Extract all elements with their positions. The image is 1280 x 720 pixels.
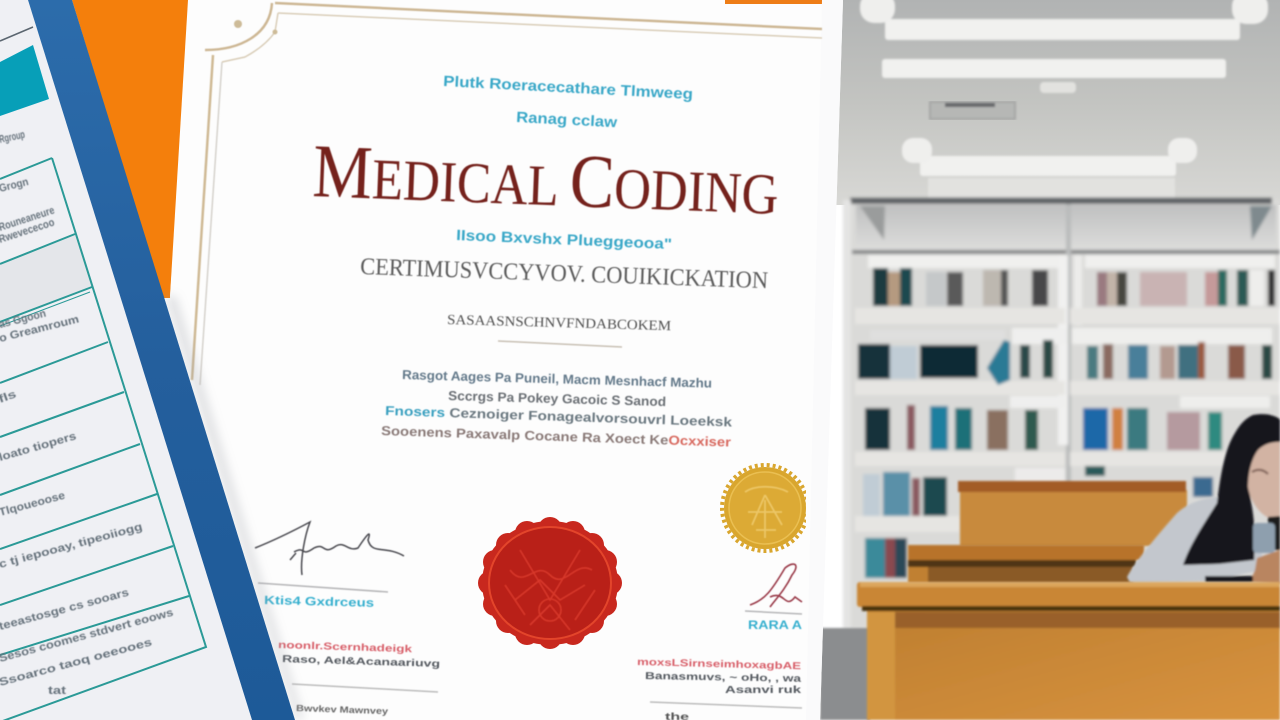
- table row labels: [0, 129, 175, 697]
- right signature block: Asanvi ruk: [725, 685, 802, 696]
- left signature block: Ktis4 Gxdrceus: [264, 593, 375, 610]
- books row 4: [863, 466, 1213, 516]
- table row labels: o Greamroum: [0, 313, 81, 345]
- ceiling lights: [860, 0, 1268, 200]
- top teal line: Plutk Roeracecathare Tlmweeg: [443, 73, 693, 103]
- teal header band: [0, 45, 49, 116]
- back desk: [958, 481, 1187, 546]
- checklist table: [0, 158, 206, 720]
- middle desk: [908, 545, 1144, 583]
- table row labels: Sesos coomes stdvert eoows: [0, 607, 175, 665]
- title: MEDICAL CODING: [311, 129, 780, 231]
- certification line: CERTIMUSVCCYVOV. COUIKICKATION: [360, 254, 768, 294]
- books row 1: [873, 268, 1275, 306]
- hands: [1250, 550, 1280, 584]
- right signature block: moxsLSirnseimhoxagbAE: [637, 657, 802, 672]
- heading text block: [311, 73, 780, 450]
- certificate: [170, 0, 843, 720]
- small caps line: SASAASNSCHNVFNDABCOKEM: [447, 313, 672, 334]
- body text line 3: Fnosers Ceznoiger Fonagealvorsouvrl Loeeksk: [385, 403, 733, 430]
- left signature block: [258, 583, 440, 716]
- top orange edge: [725, 0, 823, 4]
- woman studying: [1127, 414, 1280, 584]
- shirt: [1253, 523, 1275, 553]
- signature right: [750, 564, 802, 607]
- right signature block: Banasmuvs, ~ oHo, , wa: [645, 671, 802, 685]
- paper sheet: [0, 0, 260, 720]
- certificate sheet: [170, 0, 843, 720]
- phone: [1205, 576, 1253, 582]
- table row labels: teeastosge cs sooars: [0, 587, 130, 633]
- checklist paper: [0, 0, 260, 720]
- signature left: [255, 522, 404, 575]
- ceiling vent: [930, 102, 1015, 119]
- body text line 1: Rasgot Aages Pa Puneil, Macm Mesnhacf Mazhu: [402, 367, 712, 391]
- body text line 2: Sccrgs Pa Pokey Gacoic S Sanod: [448, 388, 666, 409]
- books row 5: [865, 538, 907, 578]
- bookshelves: [843, 198, 1280, 630]
- books row 2: [858, 340, 1272, 385]
- left signature block: noonlr.Scernhadeigk: [278, 640, 413, 655]
- sheet right edge shadow: [806, 0, 843, 720]
- floor: [820, 628, 870, 720]
- ornamental border: [192, 3, 822, 385]
- front desk: [857, 582, 1280, 720]
- table row labels: c tj iepooay, tipeoiiogg: [0, 521, 144, 571]
- ceiling: [820, 0, 1280, 205]
- arm over hair: [1175, 560, 1262, 582]
- divider: [498, 341, 622, 347]
- orange folder: [72, 0, 190, 298]
- teal subtitle: IIsoo Bxvshx Plueggeooa": [456, 227, 672, 253]
- header rule: [0, 27, 33, 41]
- table row labels: Ssoarco taoq oeeooes: [0, 636, 153, 689]
- right signature block: RARA A: [748, 618, 802, 632]
- left signature block: Bwvkev Mawnvey: [296, 703, 388, 716]
- blue folder spine: [28, 0, 295, 720]
- gold foil seal: [722, 465, 808, 551]
- right signature block: [637, 611, 802, 720]
- photo background: library: [820, 0, 1280, 720]
- folder shadow on certificate: [164, 296, 304, 720]
- red wax seal: [478, 517, 622, 649]
- brow: [1252, 470, 1268, 474]
- left signature block: Raso, Ael&Acanaariuvg: [282, 654, 440, 670]
- sweater: [1127, 497, 1262, 583]
- shaded row: [0, 234, 92, 322]
- second teal line: Ranag cclaw: [516, 109, 618, 131]
- books row 3: [865, 405, 1222, 450]
- body text line 4: Sooenens Paxavalp Cocane Ra Xoect Ke Ocxxiser: [381, 423, 731, 450]
- table row labels: tat: [48, 685, 66, 697]
- dark shoulder: [1268, 512, 1280, 550]
- hair: [1183, 414, 1280, 565]
- face: [1248, 442, 1280, 517]
